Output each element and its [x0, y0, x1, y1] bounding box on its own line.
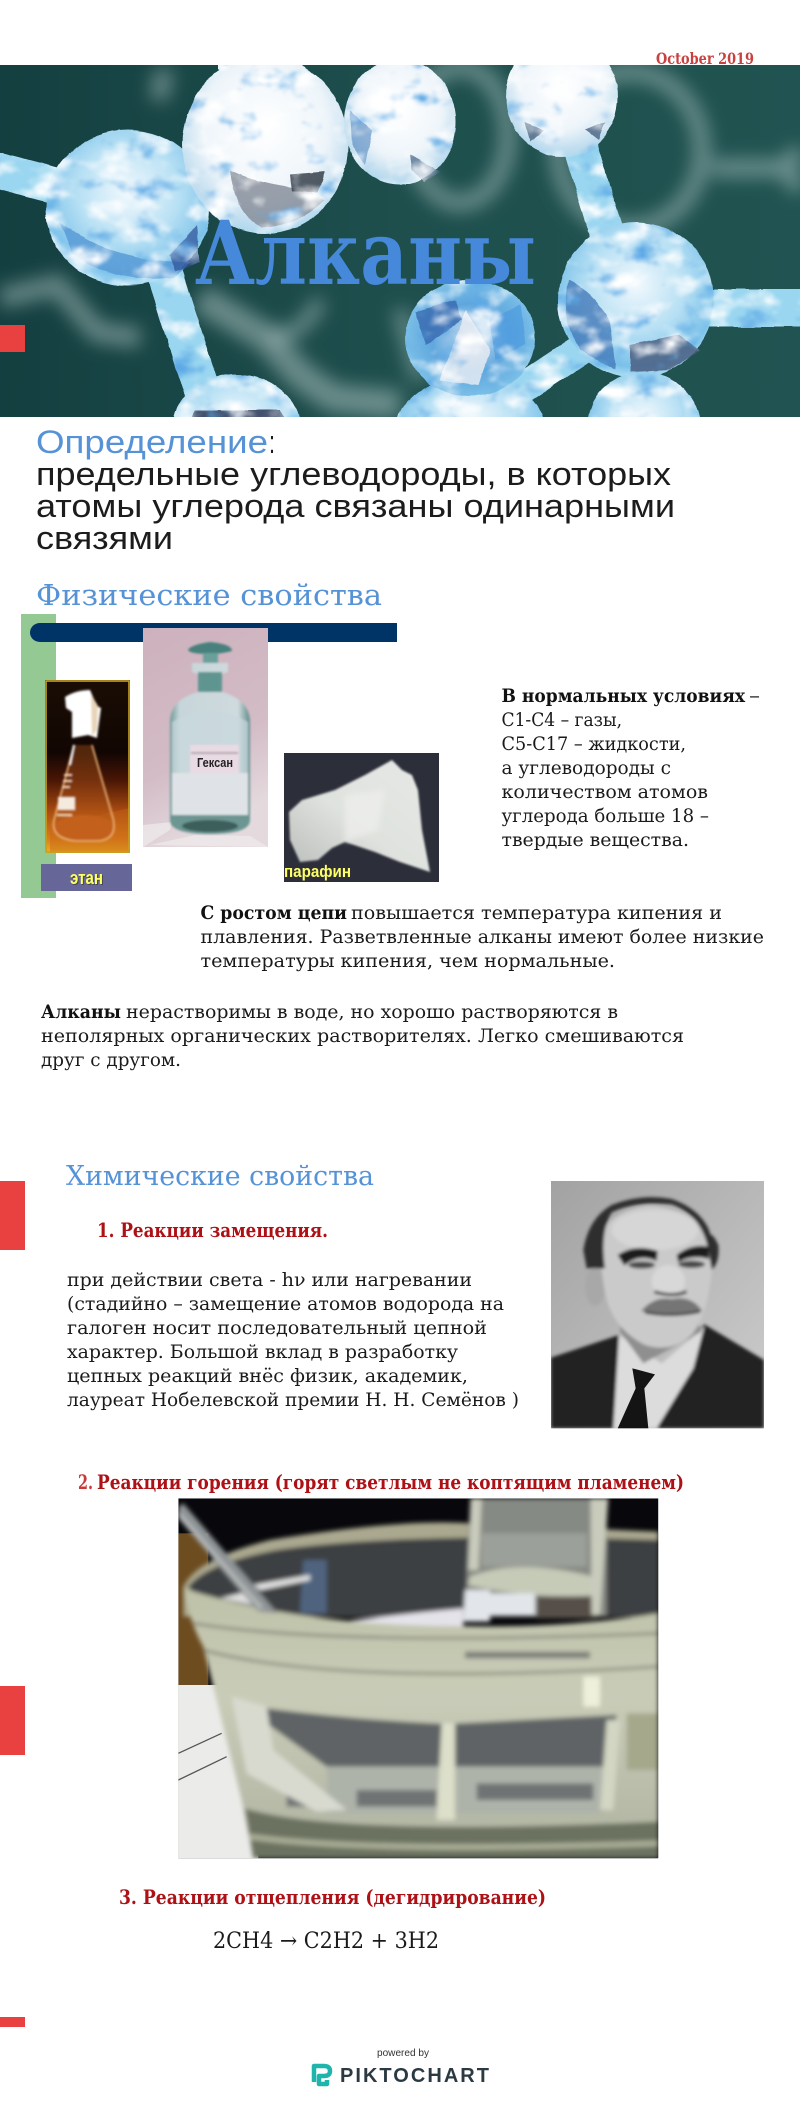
- photo: portrait of Semyonov: [551, 1181, 764, 1428]
- text: substitution description: характер. Большой вклад в разработку: [67, 1342, 458, 1363]
- definition text: атомы углерода связаны одинарными: [36, 488, 675, 524]
- text: normal conditions: а углеводороды с: [502, 758, 671, 779]
- footer: Piktochart logo: [314, 2047, 489, 2087]
- red accent markers: [0, 325, 25, 2027]
- title: Алканы: [195, 201, 536, 305]
- photo: paraffin: [284, 753, 439, 882]
- text: normal conditions: углерода больше 18 –: [502, 806, 709, 827]
- text: substitution description: [67, 1270, 519, 1411]
- photo: ethane flask: [45, 680, 130, 853]
- navy bar: [30, 623, 397, 642]
- text: chain growth: повышается температура кипения и: [351, 903, 722, 924]
- text: chain growth: температуры кипения, чем нормальные.: [200, 951, 615, 972]
- text: substitution description: лауреат Нобелевской премии Н. Н. Семёнов ): [67, 1390, 519, 1411]
- caption box: ethane: [41, 864, 132, 891]
- text: solubility: Алканы: [41, 1002, 121, 1023]
- subheading: elimination reactions: 3. Реакции отщепления (дегидрирование): [119, 1886, 546, 1909]
- text: normal conditions: В нормальных условиях: [502, 686, 746, 707]
- text: solubility: друг с другом.: [41, 1050, 181, 1071]
- text: solubility: [41, 1002, 684, 1071]
- icon: Piktochart mark: [314, 2066, 330, 2084]
- text: solubility: нерастворимы в воде, но хорошо растворяются в: [126, 1002, 618, 1023]
- label: hexane: Гексан: [197, 756, 233, 770]
- caption: paraffin: парафин: [284, 862, 351, 881]
- subheading: substitution reactions: 1. Реакции замещения.: [97, 1219, 328, 1242]
- footer: Piktochart logo: PIKTOCHART: [340, 2065, 489, 2087]
- chemical formula: 2CH4 → C2H2 + 3H2: [213, 1929, 439, 1954]
- definition text: [36, 424, 675, 556]
- caption box: ethane: этан: [71, 869, 104, 889]
- definition text: :: [269, 424, 275, 460]
- caption box: ethane: этан: [70, 868, 103, 888]
- definition text: Определение: [36, 424, 268, 460]
- text: normal conditions: –: [749, 686, 760, 707]
- text: solubility: неполярных органических растворителях. Легко смешиваются: [41, 1026, 684, 1047]
- text: normal conditions: C5-C17 – жидкости,: [502, 734, 686, 755]
- heading: chemical properties: Химические свойства: [66, 1161, 374, 1192]
- heading: physical properties: Физические свойства: [36, 578, 382, 612]
- text: chain growth: плавления. Разветвленные алканы имеют более низкие: [200, 927, 764, 948]
- green side bar: [21, 614, 56, 898]
- text: substitution description: при действии света - hν или нагревании: [67, 1270, 472, 1291]
- subheading: combustion reactions: 2.: [78, 1471, 93, 1494]
- text: substitution description: цепных реакций внёс физик, академик,: [67, 1366, 468, 1387]
- glass bonds and atoms: [0, 65, 800, 417]
- subheading: combustion reactions: Реакции горения (горят светлым не коптящим пламенем): [97, 1471, 684, 1494]
- footer: Piktochart logo: powered by: [377, 2047, 430, 2059]
- date: October 2019: [656, 49, 754, 68]
- photo: glass beaker: [178, 1498, 658, 1858]
- definition text: связями: [36, 520, 173, 556]
- text: normal conditions: количеством атомов: [502, 782, 708, 803]
- text: chain growth: [200, 903, 764, 972]
- text: normal conditions: [502, 686, 760, 851]
- hero banner: glass molecule: [0, 65, 800, 417]
- definition text: предельные углеводороды, в которых: [36, 456, 671, 492]
- text: normal conditions: твердые вещества.: [502, 830, 689, 851]
- photo: hexane bottle: [143, 628, 268, 847]
- text: normal conditions: C1-C4 – газы,: [502, 710, 622, 731]
- text: substitution description: галоген носит последовательный цепной: [67, 1318, 487, 1339]
- text: substitution description: (стадийно – замещение атомов водорода на: [67, 1294, 504, 1315]
- text: chain growth: С ростом цепи: [200, 903, 347, 924]
- blurred background molecule: [0, 67, 800, 405]
